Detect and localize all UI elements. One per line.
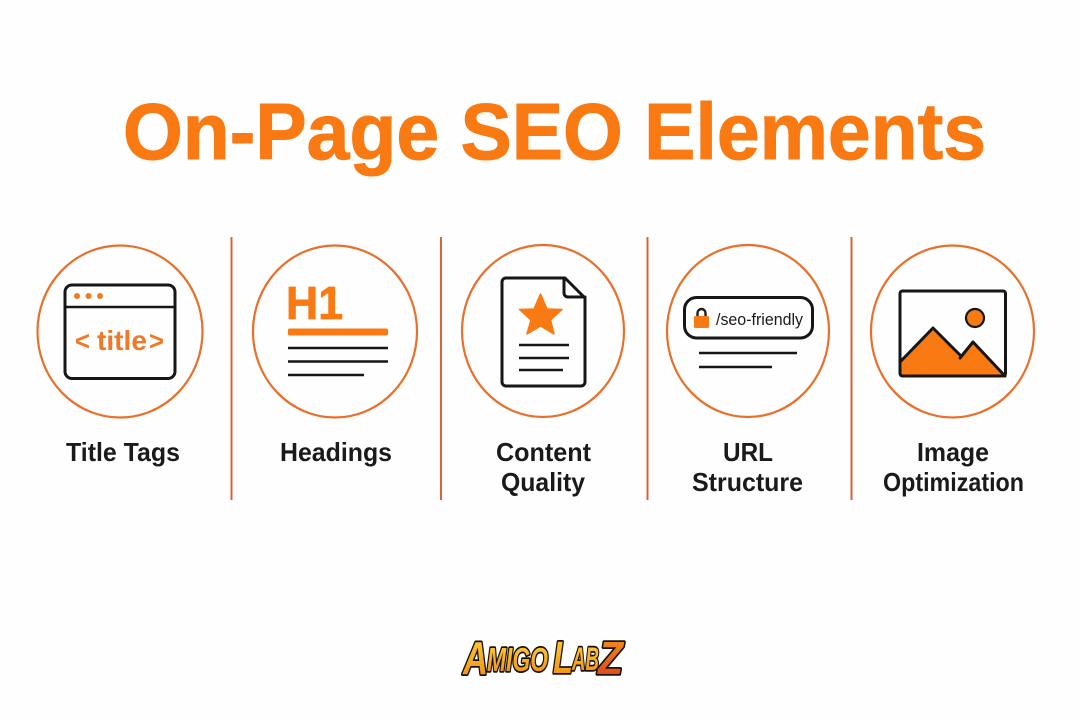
- circle: content quality: [462, 245, 624, 417]
- icon: address bar with lock: [684, 298, 812, 367]
- icon: H1 heading with text lines: [286, 277, 388, 375]
- label: url structure: [692, 437, 803, 497]
- logo: Amigo Labz: A: [462, 632, 488, 684]
- label: content quality: [496, 437, 591, 497]
- panel: image optimization: [871, 246, 1034, 497]
- logo: Amigo Labz: MIGO: [487, 641, 548, 678]
- circle: title tags: [38, 246, 202, 418]
- icon: browser window with title tag: title: [97, 325, 147, 356]
- logo: Amigo Labz: AB: [571, 641, 599, 677]
- logo: Amigo Labz: L: [553, 632, 573, 683]
- divider: [646, 237, 648, 500]
- icon: H1 heading with text lines: H1: [286, 277, 343, 329]
- label: image optimization: [883, 437, 1024, 497]
- label: content quality: Quality: [501, 467, 586, 497]
- circle: image optimization: [871, 246, 1034, 418]
- panel: title tags: [38, 246, 202, 467]
- logo: Amigo Labz: Z: [596, 632, 625, 684]
- divider: [230, 237, 232, 500]
- icon: browser window with title tag: <: [75, 326, 90, 356]
- title: On-Page SEO Elements: [123, 87, 986, 176]
- circle: headings: [253, 246, 417, 418]
- logo: Amigo Labz: [462, 632, 625, 684]
- label: image optimization: Image: [917, 437, 989, 467]
- label: url structure: URL: [723, 437, 773, 467]
- icon: browser window with title tag: [65, 285, 175, 378]
- divider: [850, 237, 852, 500]
- panel: content quality: [462, 245, 624, 497]
- icon: address bar with lock: /seo-friendly: [716, 311, 804, 329]
- icon: picture with mountains and sun: [900, 291, 1006, 376]
- label: content quality: Content: [496, 437, 591, 467]
- circle: url structure: [667, 245, 829, 417]
- divider: [440, 237, 442, 500]
- icon: browser window with title tag: >: [149, 326, 164, 356]
- label: title tags: Title Tags: [66, 437, 180, 467]
- panel: url structure: [667, 245, 829, 497]
- label: url structure: Structure: [692, 467, 803, 497]
- label: headings: Headings: [280, 437, 392, 467]
- icon: document with star: [502, 278, 585, 386]
- label: image optimization: Optimization: [883, 467, 1024, 497]
- panel: headings: [253, 246, 417, 467]
